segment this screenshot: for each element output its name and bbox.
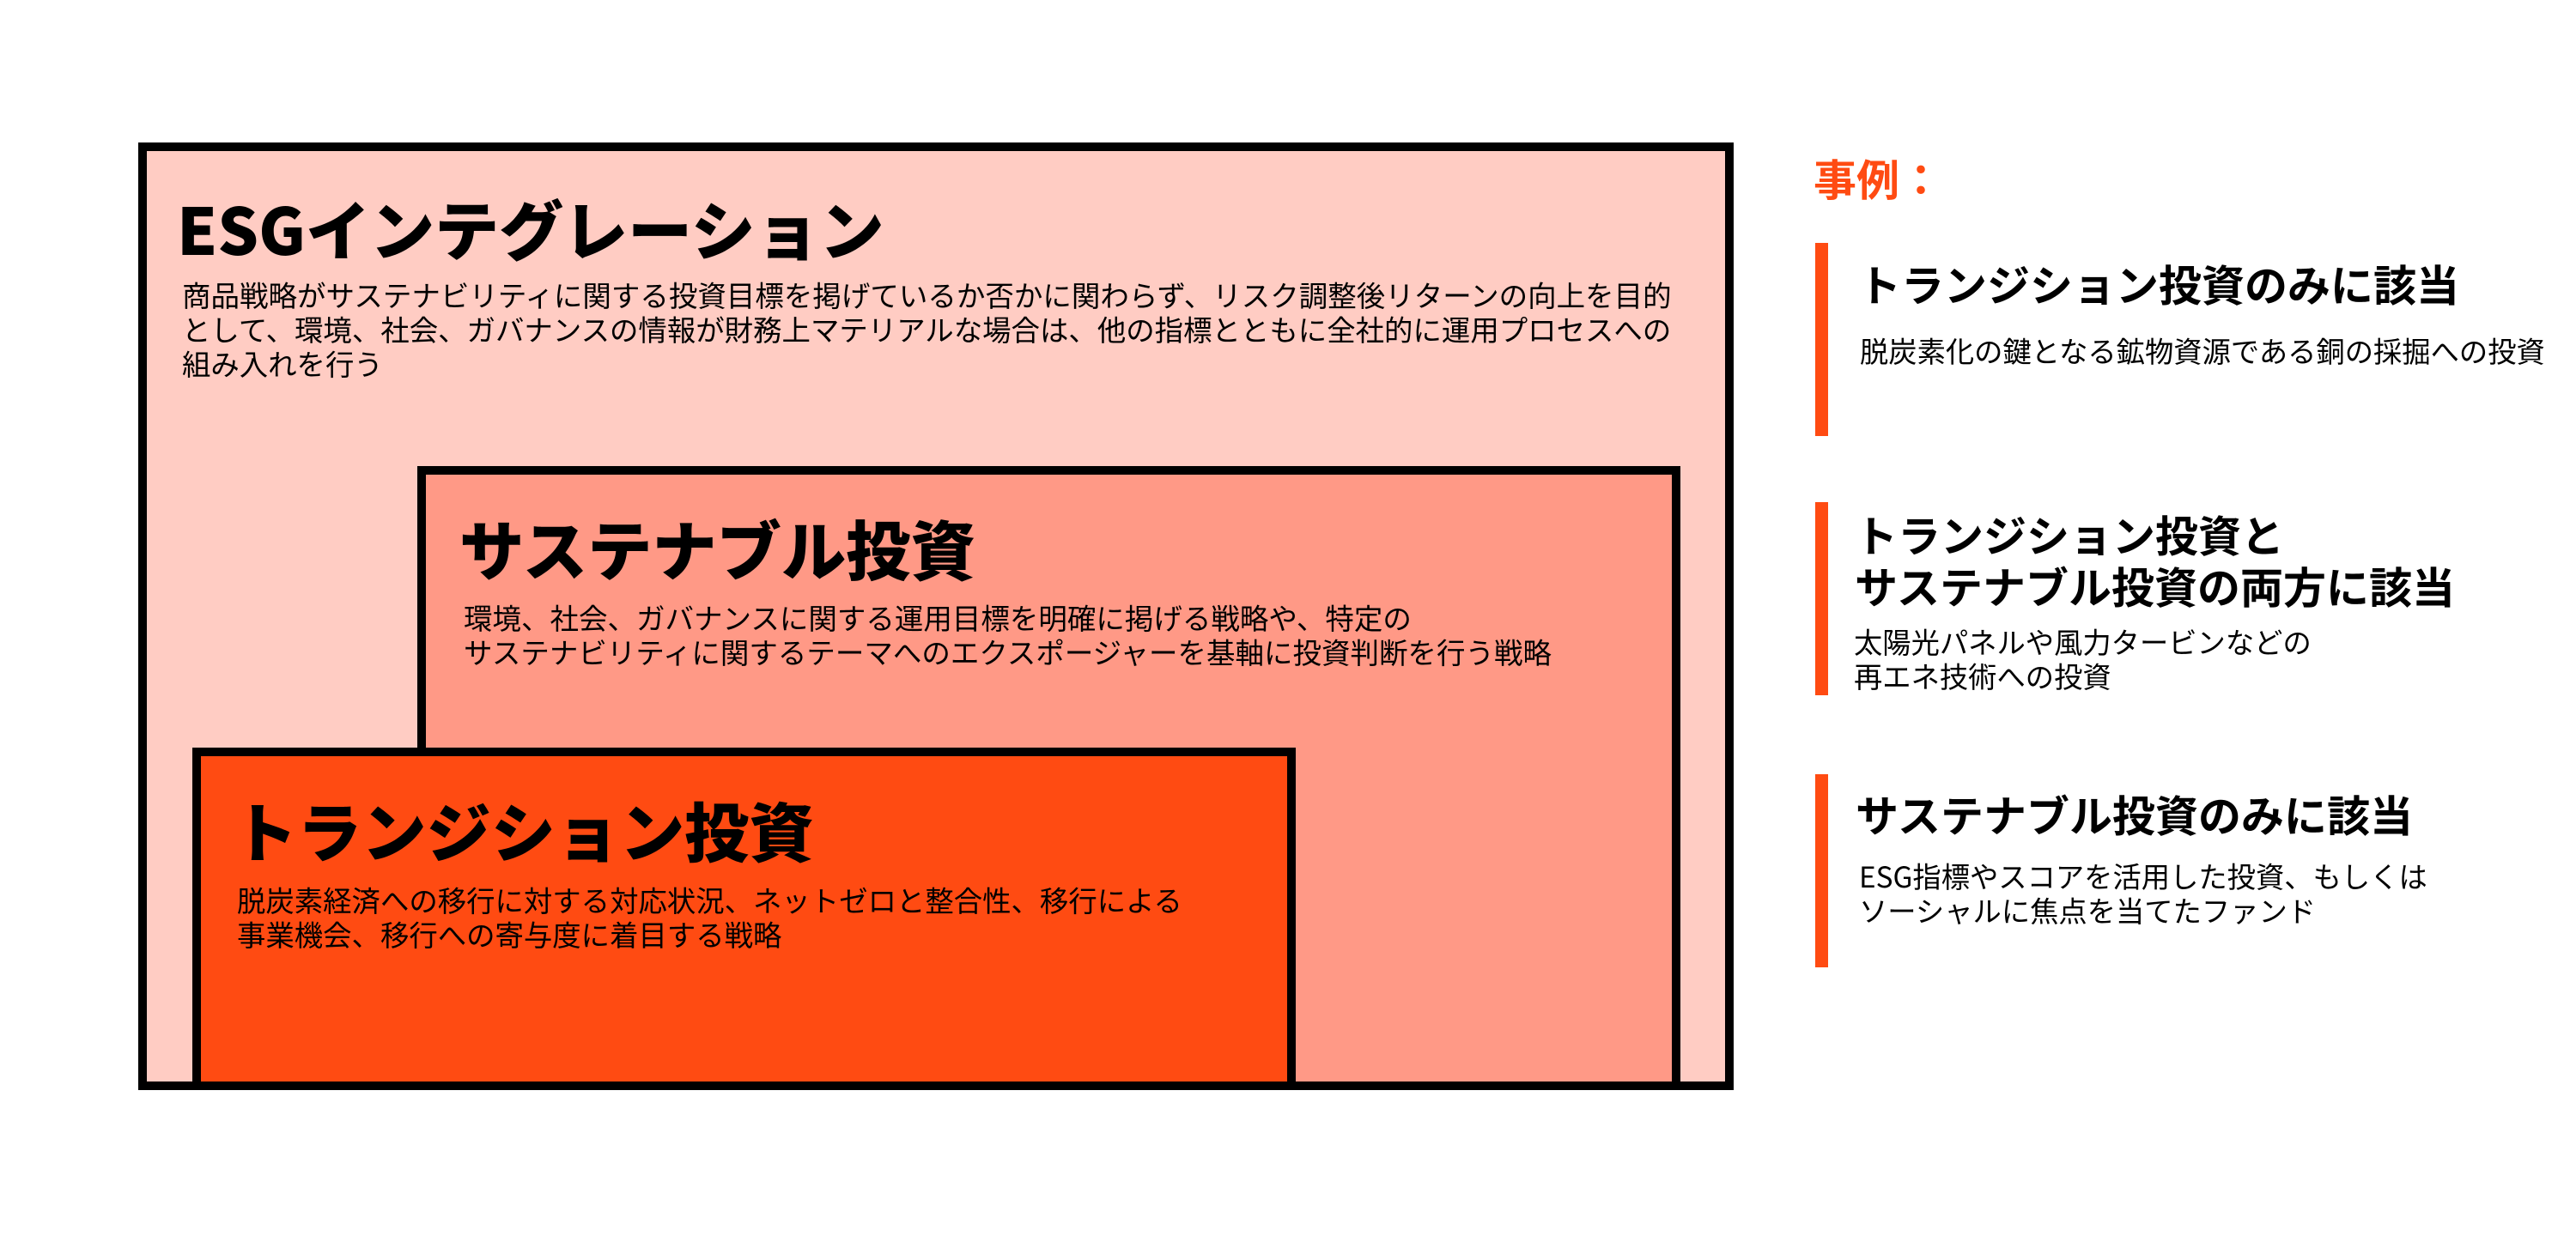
text: both example: 再エネ技術への投資 — [1854, 654, 2111, 696]
heading: sustainable investment: サステナブル投資 — [459, 500, 975, 594]
text: transition investment description — [237, 878, 1182, 954]
text: sustainable investment description: 環境、社会、ガバナンスに関する運用目標を明確に掲げる戦略や、特定の — [464, 596, 1412, 638]
case card: transition only — [1815, 243, 2545, 436]
text: sustainable investment description: サステナビリティに関するテーマへのエクスポージャーを基軸に投資判断を行う戦略 — [464, 630, 1552, 672]
accent bar — [1815, 502, 1828, 695]
panel: sustainable investment — [417, 466, 1680, 1090]
text: both example — [1854, 620, 2312, 696]
heading: both transition and sustainable — [1855, 503, 2455, 616]
heading: case examples: 事例： — [1814, 147, 1942, 209]
text: transition only example: 脱炭素化の鍵となる鉱物資源である銅の採掘への投資 — [1860, 329, 2545, 371]
heading: sustainable only: サステナブル投資のみに該当 — [1856, 783, 2413, 845]
text: both example: 太陽光パネルや風力タービンなどの — [1854, 620, 2312, 662]
heading: both transition and sustainable: サステナブル投資の両方に該当 — [1855, 554, 2455, 616]
panel: transition investment — [192, 748, 1296, 1090]
heading: both transition and sustainable: トランジション投資と — [1855, 503, 2284, 565]
text: ESG integration description: として、環境、社会、ガバナンスの情報が財務上マテリアルな場合は、他の指標とともに全社的に運用プロセスへの — [182, 307, 1671, 349]
text: sustainable only example: ESG指標やスコアを活用した投資、もしくは — [1859, 854, 2427, 896]
text: transition investment description: 事業機会、移行への寄与度に着目する戦略 — [237, 912, 781, 954]
heading: ESG integration: ESGインテグレーション — [177, 180, 884, 274]
text: transition investment description: 脱炭素経済への移行に対する対応状況、ネットゼロと整合性、移行による — [237, 878, 1182, 920]
accent bar — [1815, 774, 1828, 967]
heading: transition only: トランジション投資のみに該当 — [1858, 252, 2459, 314]
text: sustainable only example: ソーシャルに焦点を当てたファンド — [1859, 888, 2316, 930]
panel: ESG integration — [138, 142, 1734, 1090]
text: sustainable investment description — [464, 596, 1552, 672]
text: sustainable only example — [1859, 854, 2427, 930]
accent bar — [1815, 243, 1828, 436]
text: ESG integration description: 組み入れを行う — [182, 342, 383, 384]
text: ESG integration description: 商品戦略がサステナビリティに関する投資目標を掲げているか否かに関わらず、リスク調整後リターンの向上を目的 — [182, 273, 1672, 315]
text: ESG integration description — [182, 273, 1672, 384]
case card: sustainable only — [1815, 774, 2427, 967]
heading: transition investment: トランジション投資 — [233, 782, 814, 876]
case card: both — [1815, 502, 2455, 696]
